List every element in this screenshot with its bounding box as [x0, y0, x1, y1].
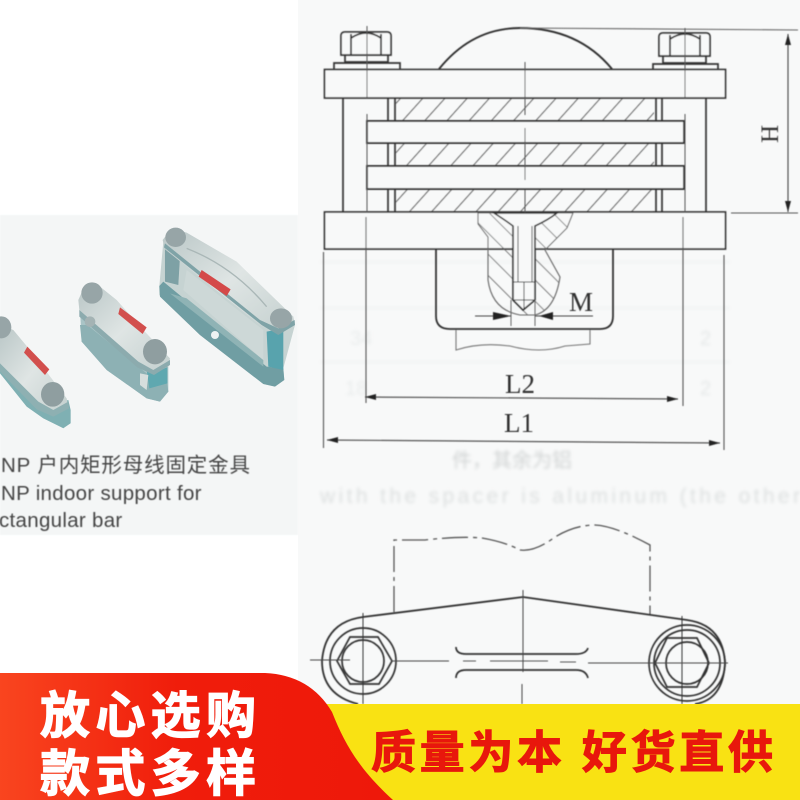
L1 dimension arrow [327, 437, 720, 446]
clamp outline [322, 597, 725, 704]
technical drawing: front section view [324, 26, 798, 450]
banner tagline: red slogan: 质量为本 好货直供 [371, 727, 773, 778]
left nut [334, 32, 400, 69]
banner: red tab [0, 673, 393, 800]
icon: medium clamp [78, 282, 170, 402]
faint show-through text: 34 [350, 328, 372, 350]
panel: drawing sheet background [298, 0, 800, 710]
right bolt [649, 616, 725, 704]
faint show-through text: 2 [700, 328, 711, 350]
product caption [0, 454, 250, 532]
top plate [324, 70, 726, 98]
left bolt [330, 613, 396, 704]
dash-dot conductor outline [394, 525, 650, 615]
dimension labels [504, 125, 784, 438]
countersunk screw [494, 213, 557, 310]
faint show-through text: 件，其余为铝 [452, 449, 572, 472]
M dimension arrows [475, 312, 593, 320]
lower body [436, 249, 613, 329]
label: L1: L1 [504, 408, 534, 438]
label: L2: L2 [505, 369, 535, 399]
bottom plate [324, 212, 726, 249]
banner: yellow strip [300, 704, 800, 800]
dome [439, 28, 612, 69]
faint show-through text: with the spacer is aluminum (the other [319, 485, 800, 508]
caption: Chinese title: NP 户内矩形母线固定金具 [1, 454, 250, 477]
L2 dimension arrow [365, 394, 678, 402]
panel: product photo background [0, 215, 298, 535]
slogan line 1: 放心选购 [40, 688, 256, 744]
icon: large clamp [159, 228, 295, 387]
label: H: H [757, 125, 784, 143]
hatched spacers [396, 98, 654, 212]
faint show-through text: 2 [700, 378, 711, 400]
right nut [653, 33, 718, 69]
centre lines [367, 26, 685, 236]
faint show-through text: 18 [345, 378, 367, 400]
caption: English line 1: NP indoor support for [1, 482, 202, 505]
faint show-through text [319, 262, 800, 508]
slot [456, 647, 588, 678]
hatched core [478, 213, 573, 315]
caption: English line 2: ctangular bar [0, 509, 123, 532]
H dimension arrow [731, 34, 798, 213]
icon: small clamp, cropped at edge [0, 316, 71, 428]
technical drawing: top view [310, 525, 728, 704]
product photo: three busbar clamps [0, 228, 295, 428]
label: M: M [569, 287, 593, 317]
banner headline: white slogan [40, 688, 256, 800]
busbars [367, 121, 684, 143]
pillars [343, 98, 706, 212]
